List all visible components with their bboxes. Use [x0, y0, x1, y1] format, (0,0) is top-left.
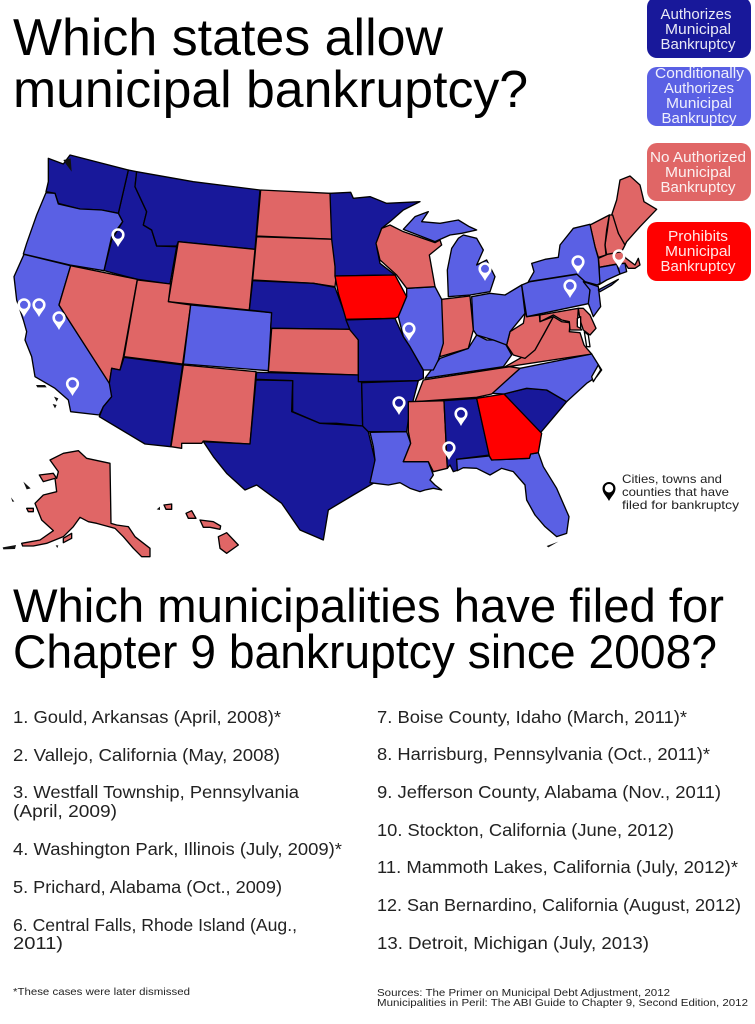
state: Virginia: [504, 317, 592, 367]
legend: no authorized: Bankruptcy: [660, 180, 736, 196]
legend: authorizes: [647, 0, 751, 58]
state: Washington: [46, 155, 128, 213]
title: which states allow municipal bankruptcy: [13, 9, 528, 119]
state: Oregon: [23, 193, 123, 271]
list: left column: 3. Westfall Township, Pennsylvania: [13, 782, 299, 802]
legend: no authorized: Municipal: [665, 165, 731, 181]
list: right column: 9. Jefferson County, Alabama (Nov., 2011): [377, 782, 721, 802]
state: Vermont: [590, 215, 609, 257]
footnote: *These cases were later dismissed: [13, 986, 190, 998]
state: Louisiana: [370, 432, 442, 492]
legend: conditionally authorizes: Authorizes: [664, 81, 734, 97]
sources: [377, 987, 748, 1009]
legend: no authorized: [647, 143, 751, 201]
state: Massachusetts: [598, 252, 640, 268]
state: Nebraska: [249, 281, 351, 329]
state: New York: [528, 224, 618, 292]
state: Missouri: [346, 318, 423, 382]
list: left column: 6. Central Falls, Rhode Island (Aug.,: [13, 915, 297, 935]
state: Tennessee: [415, 367, 520, 402]
list: right column: 7. Boise County, Idaho (March, 2011)*: [377, 707, 687, 727]
New England and New York: [528, 176, 657, 292]
bankruptcy filing pins: [17, 228, 626, 460]
state: Iowa: [335, 275, 407, 319]
map note with black pin: filed for bankruptcy: [622, 498, 739, 512]
list: left column: 2. Vallejo, California (May, 2008): [13, 745, 280, 765]
legend: authorizes: Bankruptcy: [660, 37, 736, 53]
legend: prohibits: Municipal: [665, 244, 731, 260]
state: Nevada: [59, 266, 137, 383]
state: Colorado: [183, 305, 272, 371]
state: Arkansas: [362, 381, 418, 432]
state: Alaska: [22, 451, 150, 557]
legend: authorizes: Authorizes: [660, 7, 732, 23]
state: Indiana: [440, 296, 473, 357]
state: Wyoming: [168, 242, 255, 310]
state: South Dakota: [253, 237, 337, 287]
list: left column: 4. Washington Park, Illinois (July, 2009)*: [13, 839, 342, 859]
state: Oklahoma: [256, 372, 363, 426]
legend: conditionally authorizes: Bankruptcy: [662, 111, 737, 127]
central states: [330, 192, 602, 433]
legend: no authorized: No Authorized: [650, 150, 746, 166]
Florida Keys: [547, 542, 558, 547]
list: right column: 13. Detroit, Michigan (July, 2013): [377, 933, 649, 953]
state: Mississippi: [403, 401, 447, 472]
Alaska and Hawaii: [3, 451, 238, 557]
state: Idaho: [104, 170, 177, 284]
legend: conditionally authorizes: Municipal: [666, 96, 732, 112]
legend: prohibits: Prohibits: [668, 229, 728, 245]
list: left column: (April, 2009): [13, 801, 117, 821]
state: Rhode Island: [617, 263, 627, 274]
state: Kentucky: [425, 335, 512, 378]
list: right column: 10. Stockton, California (June, 2012): [377, 820, 674, 840]
Chesapeake Bay: [577, 317, 590, 347]
legend: conditionally authorizes: Conditionally: [655, 66, 745, 82]
state: Illinois: [398, 287, 443, 370]
state: Kansas: [268, 328, 358, 375]
state: Montana: [135, 172, 260, 249]
title: which states allow municipal bankruptcy: Which states allow: [13, 9, 443, 67]
icon: black pin: [602, 482, 616, 501]
list: right column: 11. Mammoth Lakes, California (July, 2012)*: [377, 857, 738, 877]
list: left column: [13, 707, 342, 953]
title: which states allow municipal bankruptcy: municipal bankruptcy?: [13, 61, 528, 119]
list: right column: [377, 707, 741, 953]
heading: municipalities filed since 2008: Which municipalities have filed for: [13, 579, 724, 632]
sources: Municipalities in Peril: The ABI Guide to Chapter 9, Second Edition, 2012: [377, 997, 748, 1009]
state: Ohio: [472, 285, 525, 345]
Puget Sound islands: [63, 158, 72, 172]
state: Florida: [457, 453, 569, 537]
state: Maine: [612, 176, 657, 248]
list: left column: 5. Prichard, Alabama (Oct., 2009): [13, 877, 282, 897]
mid-Atlantic states: [522, 273, 601, 347]
sources: Sources: The Primer on Municipal Debt Adjustment, 2012: [377, 987, 670, 999]
state: West Virginia: [507, 308, 553, 358]
state: Connecticut: [598, 264, 620, 285]
western states: [14, 170, 375, 540]
map note with black pin: counties that have: [622, 485, 729, 499]
state: Delaware and eastern shore: [578, 308, 596, 335]
Alaskan islands: [3, 482, 72, 549]
state: Georgia: [477, 394, 542, 460]
state: North Carolina: [492, 354, 602, 402]
state: Hawaii: [157, 504, 238, 553]
state: Michigan: [403, 212, 495, 297]
legend: prohibits: Bankruptcy: [660, 259, 736, 275]
state: Texas: [203, 380, 375, 540]
state: California: [14, 254, 112, 415]
Outer Banks sound: [592, 365, 601, 382]
legend: prohibits: [647, 222, 751, 281]
state: South Carolina: [504, 388, 567, 433]
Pacific Northwest states: [23, 155, 128, 271]
heading: municipalities filed since 2008: [13, 579, 724, 678]
list: left column: 1. Gould, Arkansas (April, 2008)*: [13, 707, 281, 727]
legend: authorizes: Municipal: [665, 22, 731, 38]
state: Utah: [124, 280, 191, 364]
state: New Mexico: [171, 365, 256, 448]
Great Lakes states: [376, 212, 495, 297]
list: left column: 2011): [13, 933, 63, 953]
map: United States by bankruptcy authorization: [3, 155, 657, 557]
state: North Dakota: [257, 190, 335, 239]
California channel islands: [36, 385, 58, 408]
map note with black pin: Cities, towns and: [622, 472, 722, 486]
Gulf Coast states: [370, 394, 569, 547]
state: Alabama: [444, 398, 489, 472]
state: Maryland: [540, 308, 582, 330]
state: Arizona: [99, 357, 183, 447]
state: Minnesota: [330, 192, 420, 276]
state: New Hampshire: [605, 215, 625, 255]
map note with black pin: [602, 472, 739, 512]
state: Wisconsin: [376, 225, 442, 288]
state: New Jersey: [583, 282, 601, 317]
list: right column: 12. San Bernardino, California (August, 2012): [377, 895, 741, 915]
list: right column: 8. Harrisburg, Pennsylvania (Oct., 2011)*: [377, 744, 710, 764]
heading: municipalities filed since 2008: Chapter 9 bankruptcy since 2008?: [13, 625, 717, 678]
state: Pennsylvania: [522, 273, 590, 317]
legend: conditionally authorizes: [647, 66, 751, 127]
